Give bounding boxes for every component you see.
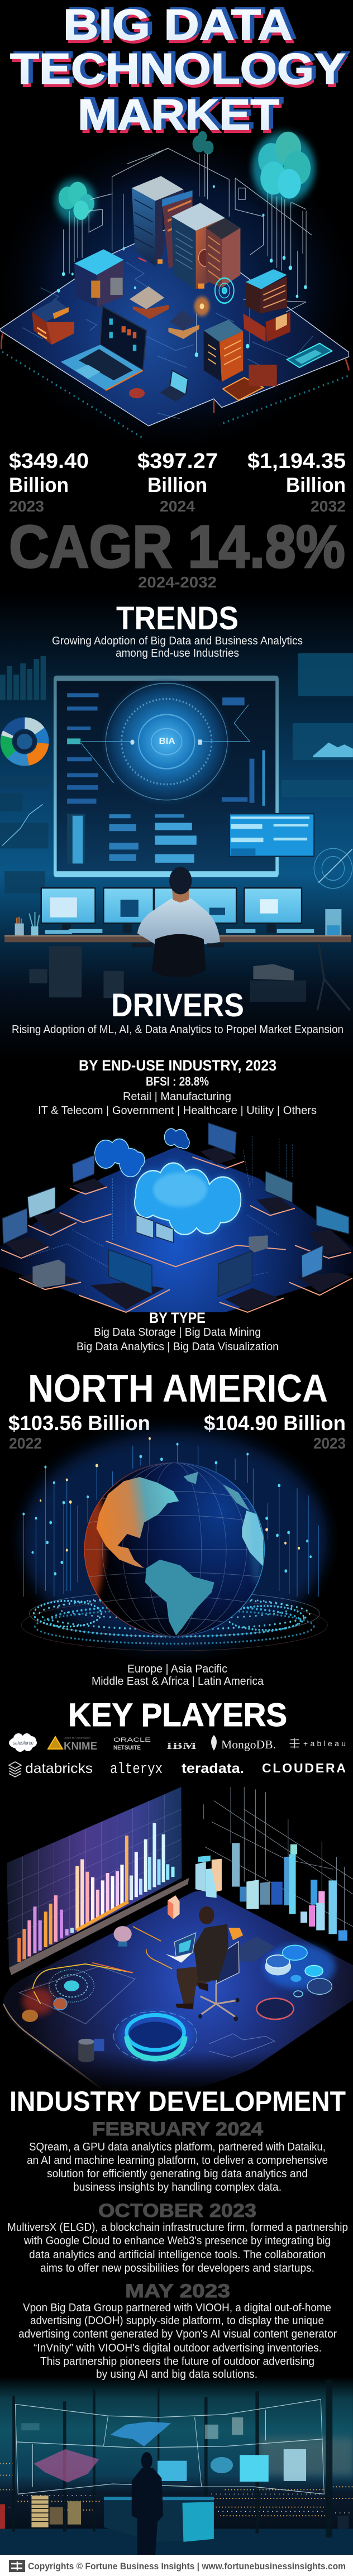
monitor hub label: BIA — [159, 737, 175, 745]
title — [10, 0, 350, 142]
left bar chart — [0, 656, 46, 700]
type segments — [77, 1326, 279, 1353]
right stacked rack — [243, 269, 290, 342]
logos — [9, 1733, 346, 1778]
development: MultiversX: aims to offer new possibilities for developers and startups. — [40, 2262, 314, 2274]
development: MultiversX — [7, 2221, 348, 2274]
logo: tableau — [289, 1738, 346, 1748]
platform underside lights — [2, 352, 348, 439]
person — [137, 890, 220, 944]
floor — [0, 2529, 353, 2555]
keypad panel — [238, 1937, 275, 1961]
red ring — [256, 1999, 294, 2019]
cylinder — [78, 2039, 104, 2062]
dusk horizon — [259, 2438, 353, 2475]
pink data map — [34, 2449, 99, 2483]
holo map — [110, 2422, 171, 2446]
logo: salesforce — [9, 1733, 37, 1752]
trends illustration: analytics wall — [0, 653, 353, 893]
circuit traces — [22, 262, 313, 419]
South America — [145, 1560, 214, 1636]
floor — [3, 1891, 353, 2090]
end-use segments — [38, 1091, 317, 1117]
right panels — [282, 653, 353, 797]
cloud: right — [252, 132, 315, 204]
graticule — [84, 1463, 265, 1637]
trends description — [52, 635, 303, 659]
Africa — [242, 1511, 264, 1567]
logo: salesforce: salesforce — [13, 1740, 34, 1746]
circuit diagram — [209, 2034, 275, 2057]
logo: Cloudera: CLOUDERA — [262, 1761, 346, 1775]
desk — [104, 2497, 214, 2542]
small laptop — [160, 370, 188, 402]
footer bar — [0, 2555, 353, 2576]
chair — [198, 1942, 240, 2021]
development: MultiversX: data analytics and artificial intelligence tools. The collaboration — [29, 2249, 326, 2261]
market size 2024 — [137, 450, 218, 515]
market size 2023 — [9, 450, 89, 515]
data blocks — [195, 1843, 347, 1941]
desk — [4, 935, 351, 1010]
towers — [0, 2496, 349, 2530]
trends scene background — [0, 589, 353, 1061]
logo: IBM: IBM — [166, 1739, 197, 1752]
development: SQream: solution for efficiently generating big data analytics and — [47, 2168, 308, 2180]
data links — [64, 148, 312, 353]
link nodes — [57, 185, 307, 357]
floor glow — [0, 1147, 353, 1312]
pencil cup — [15, 912, 40, 935]
logo: KNIME — [48, 1737, 97, 1752]
clouds — [135, 1164, 240, 1234]
globe illustration — [21, 1431, 327, 1651]
small cloud top — [165, 1129, 189, 1149]
drivers heading: DRIVERS — [111, 987, 244, 1024]
development: SQream — [27, 2141, 328, 2193]
Europe and Greenland — [183, 1472, 250, 1511]
market size 2024: Billion — [147, 474, 207, 496]
monitor stands — [62, 924, 276, 933]
title line 2: TECHNOLOGY — [10, 44, 346, 93]
wall ledge — [9, 1878, 189, 1975]
cloud: left — [55, 179, 96, 222]
mouse — [129, 388, 145, 398]
warm beam tips — [40, 1437, 300, 1552]
logo: MongoDB: MongoDB. — [221, 1738, 276, 1751]
trends description: Growing Adoption of Big Data and Business Analytics — [52, 635, 303, 647]
development: Vpon: “InVnity” with VIOOH's digital outdoor advertising inventories. — [34, 2342, 322, 2354]
CAGR period: 2024-2032 — [138, 573, 217, 591]
platform legs — [1, 333, 349, 413]
blue aura — [21, 1431, 327, 1648]
gadget — [114, 1926, 132, 1947]
other regions: Middle East & Africa | Latin America — [92, 1675, 264, 1688]
logo: teradata: teradata. — [182, 1761, 244, 1776]
signal ring — [215, 278, 234, 303]
development: Vpon: This partnership pioneers the future of outdoor advertising — [40, 2355, 314, 2368]
key players illustration: analytics floor — [0, 1787, 353, 2091]
water glass — [325, 909, 341, 935]
development: SQream: business insights by handling complex data. — [73, 2181, 282, 2193]
tower floors — [31, 2500, 49, 2522]
type segments: Big Data Storage | Big Data Mining — [94, 1326, 261, 1339]
radar — [314, 848, 352, 888]
trends description: among End-use Industries — [116, 647, 239, 659]
title line 3: MARKET — [82, 88, 283, 137]
trends heading: TRENDS — [116, 600, 238, 637]
donut chart — [0, 715, 51, 768]
globe sphere — [84, 1463, 265, 1637]
logo: Oracle NetSuite: NETSUITE — [113, 1745, 141, 1751]
server tower 3 — [206, 218, 240, 288]
coins — [22, 1998, 67, 2022]
neon ring — [114, 2011, 197, 2061]
logo: Oracle NetSuite: ORACLE — [113, 1737, 151, 1743]
platform — [0, 225, 349, 426]
data beams — [23, 1437, 318, 1597]
other regions: Europe | Asia Pacific — [127, 1663, 227, 1675]
title line 2: TECHNOLOGY — [14, 42, 350, 92]
title line 2: TECHNOLOGY — [12, 47, 348, 96]
back wall lines — [204, 1787, 353, 1937]
orange glowing card — [223, 365, 277, 400]
market size 2023: Billion — [9, 474, 69, 496]
closing illustration: control room over city — [0, 2377, 353, 2555]
orange rack — [204, 319, 243, 382]
development: Vpon: advertising (DOOH) supply-side platform, to display the unique — [30, 2315, 324, 2327]
holo screens — [21, 2417, 306, 2482]
end-use industry heading: BY END-USE INDUSTRY, 2023 — [79, 1057, 276, 1074]
legs — [176, 1966, 211, 2004]
cloud: back — [193, 131, 213, 155]
market size 2032: $1,194.35 — [247, 450, 346, 473]
book rows — [32, 1235, 268, 1288]
other regions — [92, 1663, 264, 1688]
floor edge — [3, 2004, 101, 2088]
blue hologram cluster — [264, 1944, 335, 1997]
circuit lines — [22, 1136, 293, 1281]
logo: MongoDB — [211, 1735, 276, 1751]
shoes — [175, 1982, 208, 2009]
market size 2024: 2024 — [160, 498, 195, 515]
date: May 2023: MAY 2023 — [125, 2281, 230, 2302]
orange trays — [1, 1157, 352, 1312]
logo: KNIME: Open for Innovation — [64, 1737, 90, 1740]
window frames — [12, 2379, 332, 2537]
type segments: Big Data Analytics | Big Data Visualization — [77, 1341, 279, 1353]
laptops — [2, 1123, 349, 1297]
bars: warm — [19, 1823, 173, 1962]
North America 2023: 2023 — [313, 1435, 346, 1452]
window backdrop — [0, 2377, 353, 2555]
globe surface — [73, 1463, 265, 1637]
trends illustration: analyst at desk — [4, 867, 351, 1010]
cooling unit — [74, 249, 124, 307]
type illustration: cloud network — [0, 1123, 353, 1312]
lit right edge — [248, 1502, 264, 1585]
date: February 2024: FEBRUARY 2024 — [92, 2119, 263, 2140]
office chair — [132, 934, 224, 978]
market size 2032: Billion — [286, 474, 346, 496]
laptop decks — [4, 1146, 351, 1311]
person silhouette — [132, 2452, 163, 2555]
beam tips — [22, 1443, 312, 1575]
keyboards — [45, 929, 314, 934]
date: October 2023: OCTOBER 2023 — [98, 2200, 256, 2221]
data disc — [21, 1591, 327, 1651]
chart wall — [7, 1787, 182, 1968]
key players heading: KEY PLAYERS — [68, 1697, 287, 1733]
market size 2023: 2023 — [9, 498, 44, 515]
under-desk storage — [29, 946, 306, 1002]
line chart — [2, 804, 43, 845]
title line 3: MARKET — [78, 90, 279, 139]
logo: alteryx: alteryx — [110, 1761, 163, 1778]
left lower panels — [0, 776, 51, 893]
North America 2022 — [8, 1412, 150, 1452]
development: MultiversX: with Google Cloud to enhance Web3's presence by integrating big — [23, 2235, 331, 2247]
market size 2032 — [247, 450, 346, 515]
development: SQream: SQream, a GPU data analytics platform, partnered with Dataiku, — [29, 2141, 326, 2153]
market size 2024: $397.27 — [137, 450, 218, 473]
orange tablet — [228, 1928, 243, 1941]
wall grid — [7, 1794, 181, 1961]
market size 2032: 2032 — [311, 498, 346, 515]
title line 1: BIG DATA — [65, 3, 295, 52]
development: Vpon — [18, 2302, 337, 2381]
logo: databricks: databricks — [25, 1761, 93, 1776]
wall base glow — [77, 1901, 128, 1930]
floor tray — [19, 1927, 172, 2024]
globe outline — [84, 1463, 265, 1637]
cyan glowing card — [287, 343, 332, 367]
region heading: NORTH AMERICA — [28, 1366, 328, 1410]
development: Vpon: by using AI and big data solutions. — [96, 2368, 257, 2381]
North America 2022: $103.56 Billion — [8, 1412, 150, 1435]
BFSI share: BFSI : 28.8% — [146, 1074, 209, 1088]
bottom fade — [0, 2051, 353, 2091]
hero illustration: isometric data centre platform — [0, 125, 353, 456]
small cloud left — [95, 1139, 144, 1177]
North America 2022: 2022 — [9, 1435, 42, 1452]
red storage box — [32, 299, 74, 345]
main monitor — [54, 676, 279, 877]
monitors — [41, 888, 302, 924]
city lights — [0, 2464, 353, 2516]
glowing node — [194, 297, 209, 316]
head — [199, 1906, 214, 1924]
person head — [169, 867, 192, 895]
development: SQream: an AI and machine learning platform, to deliver a comprehensive — [27, 2154, 328, 2167]
warm limb — [85, 1495, 109, 1598]
footer logo — [9, 2560, 25, 2572]
logo: KNIME: KNIME — [64, 1741, 97, 1752]
torso — [194, 1924, 228, 1981]
floor warm glow — [22, 1987, 54, 2015]
ambient glow — [0, 125, 353, 456]
North America — [96, 1477, 179, 1568]
holo panel lines — [15, 2400, 324, 2494]
book stacks — [130, 286, 199, 339]
development: Vpon: advertising content generated by Vpon's AI visual content generator — [18, 2328, 337, 2340]
logo: tableau: + a b l e a u — [303, 1739, 346, 1748]
type heading: BY TYPE — [149, 1309, 206, 1326]
end-use segments: IT & Telecom | Government | Healthcare | Utility | Others — [38, 1105, 317, 1117]
scanner disc — [49, 1970, 94, 2002]
market size 2023: $349.40 — [9, 450, 89, 473]
title line 1: BIG DATA — [63, 0, 293, 49]
server tower 2 — [171, 203, 225, 289]
title line 3: MARKET — [80, 93, 282, 142]
North America 2023: $104.90 Billion — [204, 1412, 346, 1435]
server tower 1 — [132, 176, 193, 269]
end-use segments: Retail | Manufacturing — [123, 1091, 231, 1103]
logo: Oracle NetSuite — [113, 1737, 151, 1751]
peach block — [168, 1895, 180, 1919]
right mountain chart — [313, 743, 353, 757]
North America 2023 — [204, 1412, 346, 1452]
seated analyst — [165, 1906, 240, 2021]
pop-up panel — [230, 814, 314, 857]
logo: IBM — [165, 1739, 198, 1752]
laptop — [61, 306, 146, 390]
laptop — [165, 1933, 196, 1963]
development: Vpon: Vpon Big Data Group partnered with VIOOH, a digital out-of-home — [23, 2302, 331, 2314]
